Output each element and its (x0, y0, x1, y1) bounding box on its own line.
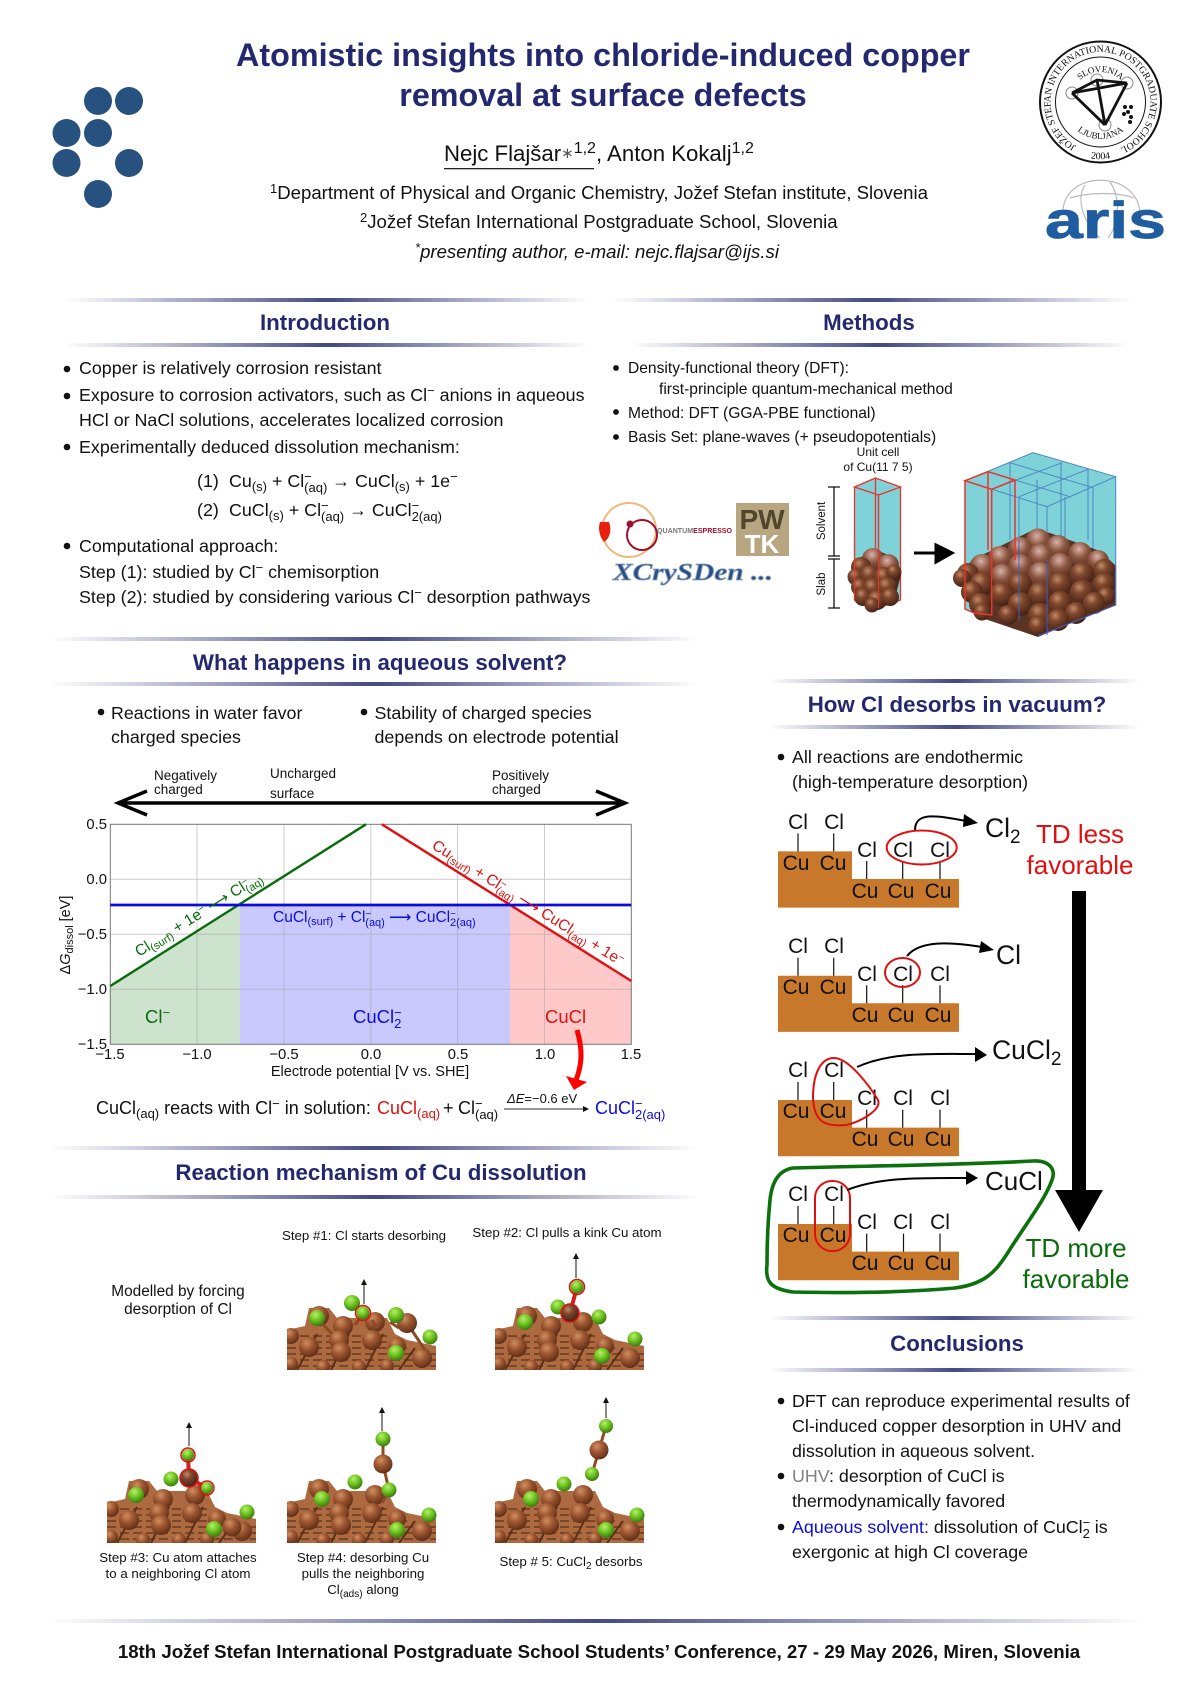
panel: introduction text: (s) (395, 479, 410, 494)
label: green reaction: (aq) (244, 875, 266, 896)
label: x ticks (95, 1047, 641, 1063)
panel: methods text (613, 360, 953, 446)
panel: step 2 (491, 1254, 644, 1374)
panel: introduction text: Step (1): studied by Cl (79, 562, 256, 582)
authors: 1,2 (732, 140, 754, 157)
panel: introduction text: anions in aqueous (435, 385, 585, 405)
diagram: CuCl desorption: Cl (930, 1211, 950, 1234)
panel: introduction text: − (304, 469, 312, 484)
equation: CuCl reacts (96, 1091, 665, 1122)
caption: step 3 (99, 1550, 257, 1581)
diagram: Cl desorption: Cu (888, 1004, 914, 1027)
caption: step 5: desorbs (592, 1554, 643, 1569)
diagram: CuCl desorption: favorable (1023, 1264, 1129, 1294)
label: unit cell (843, 445, 913, 474)
text block: conclusions: dissolution in aqueous solvent. (792, 1441, 1035, 1461)
text block: vacuum bullets: (high-temperature desorption) (792, 772, 1028, 792)
diagram: CuCl desorption: Cu (852, 1252, 878, 1275)
label: green reaction: ⟶ Cl (201, 879, 248, 917)
label: region names: 2 (394, 1016, 401, 1031)
panel: introduction text: − (427, 383, 435, 398)
title: removal at surface defects (399, 77, 807, 113)
caption: step 5: Step # 5: CuCl (499, 1554, 586, 1569)
diagram: Cl desorption (778, 935, 1021, 1032)
diagram: Cl2 desorption: Cu (852, 880, 878, 903)
panel: introduction text: − (450, 469, 458, 484)
diagram: Cl2 desorption: Cl (788, 811, 808, 834)
arrow: surface charge axis: surface (270, 786, 314, 801)
panel: introduction text: (s) (269, 508, 284, 523)
panel: methods text: Method: DFT (GGA-PBE functional) (628, 405, 876, 422)
panel: introduction text: CuCl (229, 500, 269, 520)
affiliations: 2 (360, 210, 367, 225)
equation: CuCl reacts: + (443, 1098, 454, 1118)
label: y ticks: −1.5 (78, 1037, 107, 1053)
text block: conclusions: is (1090, 1517, 1108, 1537)
diagram: Cl2 desorption: Cl (857, 839, 877, 862)
diagram: Cl desorption: Cl (824, 935, 844, 958)
diagram: Cl2 desorption: Cl (985, 813, 1010, 843)
icon: school seal: SLOVENIA (1077, 66, 1122, 80)
diagram: Cl2 desorption: Cl (824, 811, 844, 834)
label: axis titles: [eV] (58, 896, 74, 925)
label: green reaction: + 1e (166, 906, 205, 939)
icon: school seal: LJUBLJANA (1078, 126, 1124, 139)
caption: step 4: (ads) (340, 1589, 363, 1600)
icon: blue dots logo (52, 87, 143, 208)
diagram: CuCl desorption (767, 1161, 1129, 1294)
text block: conclusions: 2 (1083, 1526, 1090, 1541)
panel: introduction text: Copper is relatively corrosion resistant (79, 358, 382, 378)
diagram: CuCl2 desorption: Cl (893, 1087, 913, 1110)
equation: CuCl reacts: in solution: (280, 1098, 371, 1118)
panel: introduction text: 2(aq) (412, 509, 442, 524)
panel: introduction text: Computational approach: (79, 536, 278, 556)
diagram: Cl2 desorption: favorable (1027, 850, 1133, 880)
equation: CuCl reacts: − (635, 1096, 643, 1111)
equation: CuCl reacts: CuCl (377, 1098, 417, 1118)
diagram: CuCl2 desorption: Cl (788, 1059, 808, 1082)
label: blue reaction: CuCl (273, 909, 307, 926)
label: y ticks: −0.5 (78, 927, 107, 943)
panel: introduction text: → CuCl (344, 500, 412, 520)
label: axis titles: dissol (64, 925, 76, 953)
footer: 18th Jožef Stefan International Postgraduate School Students’ Conference, 27 - 29 May 2026, Miren, Slovenia (118, 1641, 1081, 1662)
panel: introduction text: Experimentally deduced dissolution mechanism: (79, 437, 460, 457)
icon: XCrySDen logo: XCrySDen ... (612, 560, 773, 586)
label: red reaction: + 1e (583, 933, 622, 966)
equation: CuCl reacts: − (272, 1096, 280, 1111)
label: x ticks: −1.0 (182, 1047, 212, 1063)
diagram: CuCl2 desorption: Cu (783, 1100, 809, 1123)
arrow: surface charge axis: charged (492, 782, 541, 797)
caption: step 4: pulls the neighboring (302, 1566, 424, 1581)
affiliations: * (415, 240, 421, 255)
panel: introduction text: − (256, 560, 263, 575)
equation: CuCl reacts: CuCl (96, 1098, 136, 1118)
diagram: Cl2 desorption: Cu (888, 880, 914, 903)
panel: methods text: Basis Set: plane-waves (+ pseudopotentials) (628, 429, 936, 446)
diagram: CuCl desorption: Cl (893, 1211, 913, 1234)
authors: Nejc Flajšar (444, 141, 561, 166)
arrow: surface charge axis: Negatively (154, 768, 217, 783)
label: unit cell: of Cu(11 7 5) (843, 460, 913, 474)
panel: introduction text: Exposure to corrosion activators, such as Cl (79, 385, 427, 405)
caption: step 1: Step #1: Cl starts desorbing (282, 1228, 446, 1243)
diagram: unit cell (848, 478, 902, 612)
text block: conclusions (778, 1391, 1130, 1562)
affiliations: Department of Physical and Organic Chemistry, Jožef Stefan institute, Slovenia (277, 182, 929, 203)
diagram: Cl2 desorption: Cl (930, 839, 950, 862)
icon: school seal: JOŽEF STEFAN INTERNATIONAL POSTGRADUATE SCHOOL (1044, 46, 1157, 153)
panel: introduction text: − (414, 585, 422, 600)
equation: CuCl reacts: Cl (458, 1098, 475, 1118)
text block: aqueous bullets: Stability of charged species (374, 703, 592, 723)
callout: green favorable outline (767, 1161, 1053, 1293)
panel: methods text: first-principle quantum-mechanical method (659, 381, 953, 398)
authors: ∗ (561, 145, 574, 162)
label: x ticks: −0.5 (269, 1047, 299, 1063)
icon: PWTK logo (736, 503, 789, 559)
affiliations (270, 181, 929, 262)
panel: introduction text: chemisorption (263, 562, 379, 582)
diagram: CuCl2 desorption: Cu (888, 1128, 914, 1151)
authors: , Anton Kokalj (596, 141, 732, 166)
icon: ARIS logo: aris (1045, 192, 1166, 250)
equation: CuCl reacts: (aq) (475, 1107, 498, 1122)
caption: step 5: 2 (586, 1561, 592, 1572)
label: x ticks: 1.0 (535, 1047, 555, 1063)
label: region names: CuCl (353, 1006, 394, 1027)
diagram: Cl2 desorption: Cu (783, 852, 809, 875)
text block: aqueous bullets: depends on electrode potential (374, 727, 619, 747)
arrow: surface charge axis: Uncharged (270, 766, 336, 781)
panel: introduction text: (1) (197, 471, 219, 491)
diagram: CuCl2 desorption: Cu (852, 1128, 878, 1151)
diagram: Cl desorption: Cu (783, 976, 809, 999)
diagram: Cl desorption: Cu (820, 976, 846, 999)
diagram: Cl2 desorption (778, 811, 1133, 908)
label: green reaction: − (196, 903, 207, 915)
chart: dissolution free energy (58, 817, 641, 1080)
diagram: CuCl desorption: TD more (1025, 1233, 1127, 1263)
label: axis titles: ΔG (58, 953, 74, 974)
label: y ticks: 0.0 (86, 872, 107, 888)
diagram: CuCl2 desorption: CuCl (992, 1035, 1051, 1065)
diagram: CuCl2 desorption (778, 1035, 1061, 1156)
text block: modelled by forcing (111, 1283, 245, 1318)
text block: vacuum bullets (778, 747, 1028, 792)
diagram: CuCl2 desorption: Cl (824, 1059, 844, 1082)
label: axis titles: Electrode potential [V vs. SHE] (271, 1064, 469, 1080)
panel: introduction text: → CuCl (327, 471, 395, 491)
scale: solvent and slab (816, 487, 840, 608)
panel: step 3 (103, 1423, 256, 1547)
diagram: Cl desorption: Cu (925, 1004, 951, 1027)
panel: introduction text: (aq) (304, 480, 327, 495)
label: red reaction: Cu (429, 837, 455, 862)
arrow: surface charge axis: charged (154, 782, 203, 797)
panel: step 5 (491, 1398, 644, 1547)
diagram: Cl desorption: Cl (893, 963, 913, 986)
panel: step 1 (283, 1280, 438, 1374)
panel: introduction text: Step (2): studied by considering various Cl (79, 587, 414, 607)
caption: step 4: Step #4: desorbing Cu (297, 1550, 429, 1565)
label: red reaction: + Cl (467, 861, 504, 893)
diagram: CuCl desorption: Cu (820, 1224, 846, 1247)
arrow: surface charge axis: Positively (492, 768, 549, 783)
label: blue reaction: ⟶ CuCl (385, 909, 450, 926)
heading: Introduction: Introduction (260, 310, 390, 335)
caption: step 3: Step #3: Cu atom attaches (99, 1550, 257, 1565)
icon: school seal: 2004 (1091, 152, 1110, 160)
text block: conclusions: − (1083, 1515, 1090, 1530)
equation: CuCl reacts: (aq) (136, 1106, 159, 1121)
text block: conclusions: Cl-induced copper desorption in UHV and (792, 1416, 1121, 1436)
heading: Methods: Methods (823, 310, 915, 335)
label: y ticks: −1.0 (78, 982, 107, 998)
caption: step 4: along (363, 1582, 399, 1597)
label: x ticks: 1.5 (621, 1047, 641, 1063)
text block: conclusions: UHV: desorption of CuCl is (792, 1466, 1005, 1486)
diagram: supercell (953, 453, 1116, 637)
scale: solvent and slab: Slab (816, 572, 828, 596)
text block: aqueous bullets: Reactions in water favor (111, 703, 302, 723)
equation: CuCl reacts: ΔE=−0.6 eV (506, 1091, 578, 1106)
text block: conclusions: exergonic at high Cl coverage (792, 1542, 1028, 1562)
icon: PWTK logo: PW (739, 504, 785, 535)
label: blue reaction: (aq) (365, 917, 385, 929)
label: region names: Cl (145, 1006, 162, 1027)
scale: solvent and slab: Solvent (816, 501, 828, 540)
diagram: CuCl2 desorption: 2 (1051, 1049, 1061, 1070)
diagram: CuCl desorption: Cl (824, 1183, 844, 1206)
diagram: CuCl2 desorption: Cu (925, 1128, 951, 1151)
equation: CuCl reacts: − (475, 1096, 483, 1111)
panel: methods text: Density-functional theory (DFT): (628, 360, 849, 377)
diagram: CuCl2 desorption: Cl (857, 1087, 877, 1110)
label: x ticks: 0.0 (361, 1047, 381, 1063)
text block: vacuum bullets: All reactions are endothermic (792, 747, 1023, 767)
label: red reaction: (aq) (493, 885, 516, 905)
text block: modelled by forcing: Modelled by forcing (111, 1283, 245, 1300)
diagram: Cl desorption: Cu (852, 1004, 878, 1027)
label: region names: CuCl (545, 1006, 586, 1027)
label: red reaction: − (498, 878, 509, 891)
diagram: Cl desorption: Cl (788, 935, 808, 958)
panel: introduction text: Cu (229, 471, 252, 491)
text block: aqueous bullets: charged species (111, 727, 241, 747)
label: blue reaction: − (450, 909, 456, 920)
diagram: CuCl desorption: Cu (925, 1252, 951, 1275)
caption: step 3: to a neighboring Cl atom (106, 1566, 250, 1581)
equation: CuCl reacts: reacts with Cl (159, 1098, 272, 1118)
label: x ticks: 0.5 (448, 1047, 468, 1063)
label: red reaction: (aq) (566, 929, 589, 950)
label: green reaction: − (239, 876, 250, 888)
diagram: Cl2 desorption: TD less (1036, 819, 1124, 849)
diagram: Cl desorption: Cl (930, 963, 950, 986)
label: axis titles (58, 896, 469, 1080)
icon: Quantum Espresso logo: QUANTUMESPRESSO (657, 526, 732, 535)
text block: modelled by forcing: desorption of Cl (124, 1301, 232, 1318)
arrow: surface charge axis (118, 766, 625, 815)
panel: introduction text: + Cl (267, 471, 304, 491)
caption: step 2: Step #2: Cl pulls a kink Cu atom (472, 1225, 662, 1240)
panel: introduction text: (2) (197, 500, 219, 520)
equation: CuCl reacts: 2(aq) (635, 1107, 665, 1122)
label: red reaction: ⟶ CuCl (511, 888, 576, 938)
equation: CuCl reacts: (aq) (417, 1106, 440, 1121)
text block: conclusions: thermodynamically favored (792, 1491, 1005, 1511)
heading: Reaction mechanism: Reaction mechanism of Cu dissolution (175, 1160, 587, 1185)
label: region names: − (394, 1005, 402, 1020)
label: blue reaction: − (365, 909, 371, 920)
diagram: CuCl2 desorption: Cl (930, 1087, 950, 1110)
label: region names: − (162, 1005, 170, 1020)
caption: step 4 (297, 1550, 429, 1600)
diagram: CuCl desorption: Cl (857, 1211, 877, 1234)
text block: conclusions: Aqueous solvent: dissolution of CuCl (792, 1517, 1083, 1537)
panel: introduction text: + 1e (410, 471, 450, 491)
label: region names (145, 1005, 586, 1031)
label: unit cell: Unit cell (857, 445, 899, 459)
diagram: Cl2 desorption: Cu (925, 880, 951, 903)
diagram: Cl2 desorption: 2 (1010, 827, 1021, 848)
title (236, 37, 970, 113)
label: red reaction: (surf) (445, 853, 473, 877)
diagram: CuCl desorption: Cu (783, 1224, 809, 1247)
authors: 1,2 (574, 140, 596, 157)
caption: step 4: Cl (327, 1582, 340, 1597)
panel: introduction text: + Cl (284, 500, 321, 520)
label: red reaction: − (616, 952, 627, 964)
diagram: CuCl2 desorption: Cu (820, 1100, 846, 1123)
affiliations: 1 (270, 181, 277, 196)
label: y ticks (78, 817, 107, 1053)
diagram: Cl2 desorption: Cl (893, 839, 913, 862)
heading: What happens in aqueous solvent?: What happens in aqueous solvent? (193, 650, 567, 675)
arrow: red curved (566, 1030, 587, 1090)
arrow: cell to slab (914, 545, 952, 562)
divider rules (45, 298, 1145, 1623)
panel: introduction text: (s) (252, 479, 267, 494)
panel: introduction text: desorption pathways (422, 587, 591, 607)
affiliations: Jožef Stefan International Postgraduate School, Slovenia (367, 211, 838, 232)
label: x ticks: −1.5 (95, 1047, 125, 1063)
panel: introduction text: (aq) (321, 509, 344, 524)
diagram: Cl desorption: Cl (857, 963, 877, 986)
diagram: CuCl desorption: CuCl (985, 1166, 1043, 1196)
panel: introduction text (64, 358, 591, 607)
panel: step 4 (283, 1408, 436, 1547)
affiliations: presenting author, e-mail: nejc.flajsar@ijs.si (419, 241, 780, 262)
arrow: favorability (1055, 891, 1103, 1232)
heading: How Cl desorbs in vacuum?: How Cl desorbs in vacuum? (808, 692, 1106, 717)
panel: introduction text: HCl or NaCl solutions, accelerates localized corrosion (79, 410, 503, 430)
diagram: CuCl desorption: Cu (888, 1252, 914, 1275)
panel: introduction text: − (321, 498, 329, 513)
authors (444, 140, 754, 169)
panel: introduction text: − (412, 498, 419, 513)
icon: PWTK logo: TK (745, 529, 780, 559)
diagram: CuCl desorption: Cl (788, 1183, 808, 1206)
icon: ARIS logo (1045, 180, 1166, 250)
heading: Conclusions: Conclusions (890, 1331, 1024, 1356)
label: blue reaction: 2(aq) (450, 917, 476, 929)
text block: aqueous bullets (98, 703, 619, 747)
label: green reaction: Cl (132, 938, 154, 960)
text block: conclusions: DFT can reproduce experimental results of (792, 1391, 1130, 1411)
label: blue reaction: + Cl (333, 909, 365, 926)
equation: CuCl reacts: CuCl (595, 1098, 635, 1118)
icon: Quantum Espresso logo (599, 503, 732, 557)
label: y ticks: 0.5 (86, 817, 107, 833)
label: blue reaction: (surf) (307, 916, 333, 928)
diagram: Cl2 desorption: Cu (820, 852, 846, 875)
diagram: Cl desorption: Cl (996, 940, 1021, 970)
title: Atomistic insights into chloride-induced copper (236, 37, 970, 73)
label: green reaction: (surf) (148, 931, 176, 954)
